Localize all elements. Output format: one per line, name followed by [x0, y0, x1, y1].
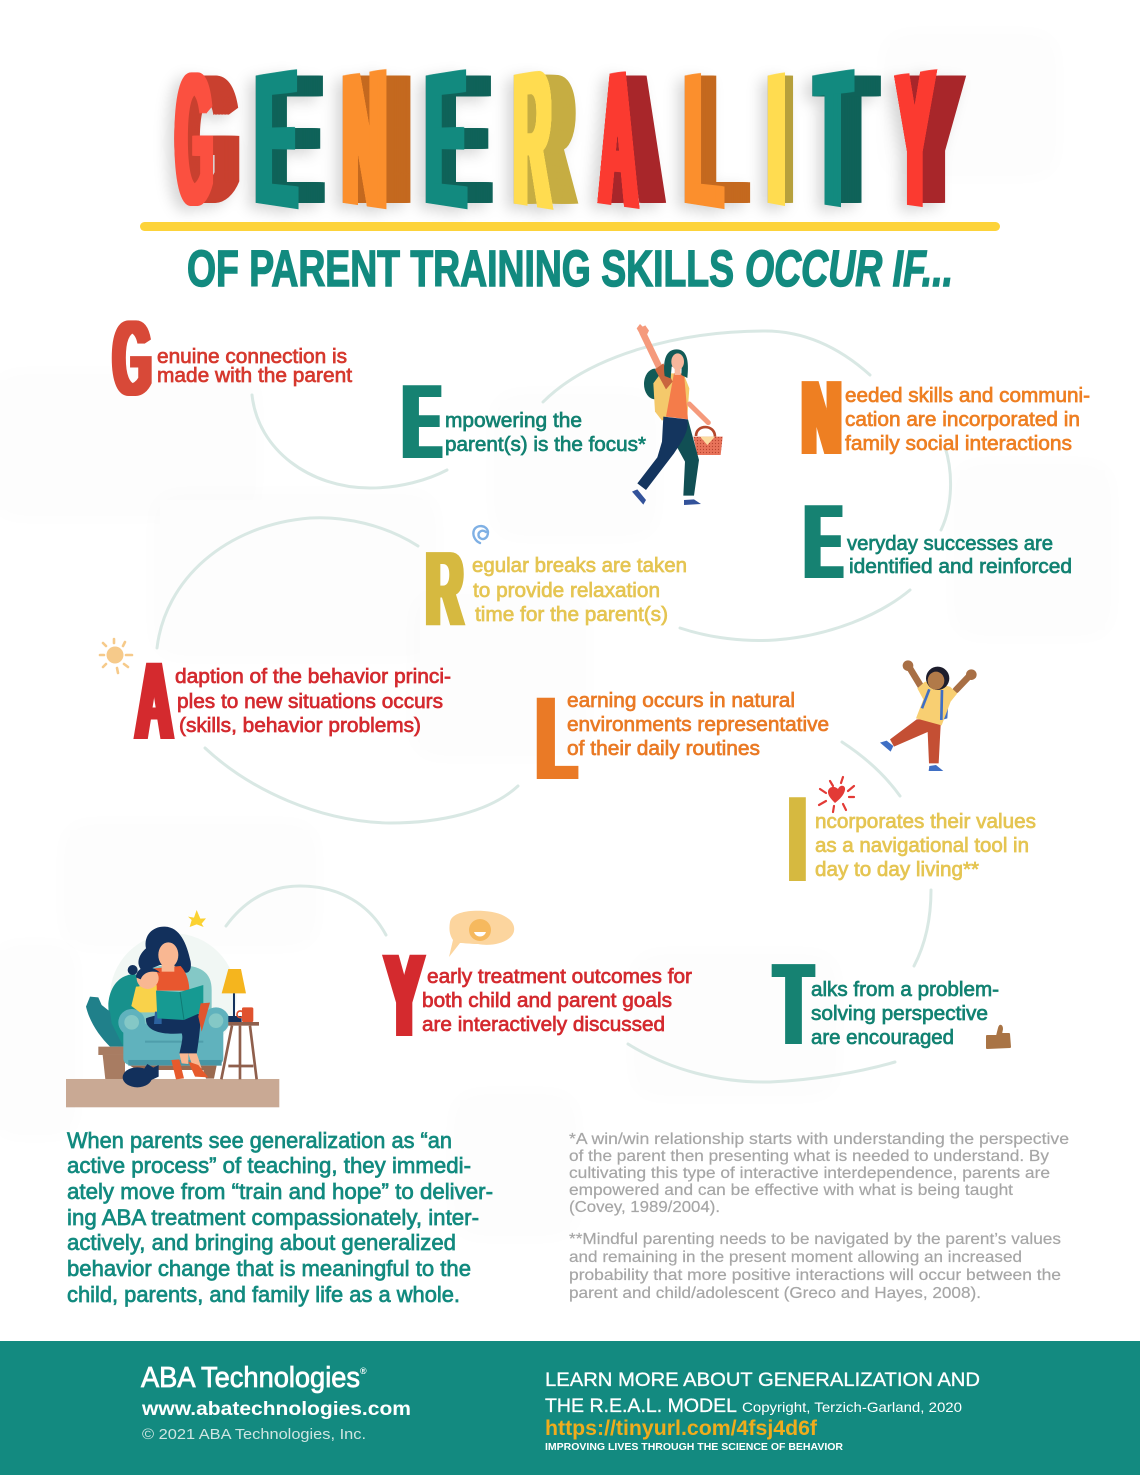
subtitle: OCCUR IF... — [745, 240, 953, 297]
illustration: mother reading with child — [66, 910, 279, 1107]
block: E everyday successes — [805, 483, 1072, 601]
block: E empowering: mpowering the — [445, 410, 582, 432]
block: Y yearly treatment: both child and parent goals — [422, 990, 672, 1012]
block: R regular breaks: time for the parent(s) — [475, 604, 668, 626]
footnotes: **Mindful parenting needs to be navigated by the parent’s values — [569, 1231, 1061, 1248]
block: R regular breaks: egular breaks are taken — [472, 555, 687, 577]
title underline bar — [140, 222, 1000, 231]
title: GENERALITY 3D letters: E — [420, 36, 479, 244]
title: GENERALITY 3D letters: G — [172, 34, 209, 246]
bottom-left summary paragraph: child, parents, and family life as a whole. — [67, 1282, 460, 1307]
footer call to action — [545, 1370, 980, 1453]
bottom-left summary paragraph — [67, 1128, 493, 1307]
footer logo and website: ABA Technologies — [141, 1362, 360, 1394]
title: GENERALITY 3D letters: L — [681, 28, 717, 252]
block: N needed skills — [802, 358, 1090, 477]
footer call to action: https://tinyurl.com/4fsj4d6f — [545, 1417, 818, 1440]
block: N needed skills: eeded skills and communi- — [845, 385, 1090, 407]
title: GENERALITY 3D letters: T — [812, 28, 847, 252]
icon: thumbs up — [987, 1026, 1010, 1048]
block: Y yearly treatment: Y — [385, 929, 423, 1061]
block: E empowering: E — [403, 362, 441, 480]
block: L learning: of their daily routines — [567, 738, 760, 760]
illustration: child jumping — [880, 660, 977, 771]
block: Y yearly treatment: are interactively discussed — [422, 1014, 665, 1036]
title: GENERALITY 3D letters — [162, 27, 966, 253]
footnotes: of the parent then presenting what is needed to understand. By — [569, 1148, 1049, 1165]
block: A adaption: ples to new situations occurs — [177, 691, 443, 713]
block: I incorporates: as a navigational tool in — [815, 835, 1029, 857]
block: A adaption — [136, 640, 451, 763]
footnotes: cultivating this type of interactive interdependence, parents are — [569, 1165, 1050, 1182]
title: GENERALITY 3D letters: E — [422, 28, 461, 252]
title: GENERALITY 3D letters: E — [250, 36, 310, 244]
block: T talks: solving perspective — [811, 1003, 988, 1025]
title: GENERALITY 3D letters: R — [509, 35, 564, 245]
block: T talks: are encouraged — [811, 1027, 954, 1049]
block: A adaption: (skills, behavior problems) — [179, 715, 421, 737]
block: E empowering — [403, 362, 646, 480]
block: I incorporates — [789, 772, 1036, 908]
title: GENERALITY 3D letters: G — [171, 39, 229, 241]
block: L learning — [537, 673, 829, 805]
title: GENERALITY 3D letters: Y — [893, 36, 950, 244]
icon: heart with rays — [819, 777, 854, 812]
block: G genuine connection: G — [113, 298, 151, 418]
title: GENERALITY 3D letters: A — [596, 28, 633, 252]
block: A adaption: daption of the behavior princi- — [175, 666, 451, 688]
title: GENERALITY 3D letters: N — [339, 27, 382, 253]
footnotes — [569, 1131, 1069, 1302]
footnotes: parent and child/adolescent (Greco and Hayes, 2008). — [569, 1285, 981, 1302]
block: R regular breaks: R — [426, 530, 463, 648]
block: A adaption: A — [136, 640, 173, 763]
block: R regular breaks — [426, 530, 687, 648]
icon: chat bubble with smile — [449, 911, 514, 957]
title: GENERALITY 3D letters: E — [252, 28, 292, 252]
block: G genuine connection: enuine connection is — [157, 346, 347, 368]
block: T talks: alks from a problem- — [811, 979, 999, 1001]
block: L learning: L — [537, 673, 576, 805]
footer call to action: LEARN MORE ABOUT GENERALIZATION AND — [545, 1370, 980, 1391]
bottom-left summary paragraph: ately move from “train and hope” to deliver- — [67, 1179, 493, 1204]
footer call to action: IMPROVING LIVES THROUGH THE SCIENCE OF BEHAVIOR — [545, 1442, 844, 1453]
block: N needed skills: family social interactions — [845, 433, 1072, 455]
footnotes: probability that more positive interactions will occur between the — [569, 1267, 1061, 1284]
footer call to action: THE R.E.A.L. MODEL — [545, 1396, 737, 1417]
subtitle: OF PARENT TRAINING SKILLS — [187, 240, 734, 297]
block: E everyday successes: identified and reinforced — [849, 556, 1072, 578]
block: R regular breaks: to provide relaxation — [473, 580, 660, 602]
block: E everyday successes: E — [805, 483, 842, 601]
block: Y yearly treatment: early treatment outcomes for — [427, 966, 692, 988]
title: GENERALITY 3D letters: N — [337, 36, 399, 244]
illustration: woman waving with bag — [632, 324, 723, 505]
block: E everyday successes: veryday successes are — [847, 533, 1053, 555]
title: GENERALITY 3D letters: I — [764, 33, 780, 247]
block: G genuine connection: made with the parent — [157, 365, 352, 387]
bottom-left summary paragraph: active process” of teaching, they immedi- — [67, 1153, 471, 1178]
footer logo and website: www.abatechnologies.com — [141, 1399, 411, 1420]
bottom-left summary paragraph: behavior change that is meaningful to the — [67, 1256, 471, 1281]
block: I incorporates: I — [789, 772, 806, 908]
connecting arcs — [157, 331, 951, 1082]
block: I incorporates: day to day living** — [815, 859, 979, 881]
block: N needed skills: cation are incorporated in — [845, 409, 1080, 431]
block: Y yearly treatment — [385, 929, 692, 1061]
bottom-left summary paragraph: ing ABA treatment compassionately, inter- — [67, 1205, 479, 1230]
icon: sun — [100, 639, 132, 673]
block: E empowering: parent(s) is the focus* — [445, 434, 646, 456]
block: T talks: T — [775, 939, 812, 1069]
footer logo and website: © 2021 ABA Technologies, Inc. — [142, 1426, 366, 1443]
footnotes: (Covey, 1989/2004). — [569, 1199, 720, 1216]
footer logo and website — [141, 1362, 411, 1443]
footer call to action: Copyright, Terzich-Garland, 2020 — [742, 1399, 962, 1415]
block: G genuine connection — [113, 298, 352, 418]
icon: swirl — [473, 526, 488, 543]
title: GENERALITY 3D letters: R — [511, 27, 547, 253]
bottom-left summary paragraph: actively, and bringing about generalized — [67, 1230, 456, 1255]
block: L learning: environments representative — [567, 714, 829, 736]
footnotes: empowered and can be effective with what is being taught — [569, 1182, 1014, 1199]
footer logo and website: ® — [360, 1366, 367, 1376]
bottom-left summary paragraph: When parents see generalization as “an — [67, 1128, 452, 1153]
block: I incorporates: ncorporates their values — [815, 811, 1036, 833]
title: GENERALITY 3D letters: I — [763, 36, 783, 244]
title: GENERALITY 3D letters: L — [679, 36, 735, 244]
block: L learning: earning occurs in natural — [567, 690, 795, 712]
footnotes: *A win/win relationship starts with understanding the perspective — [569, 1131, 1069, 1148]
title: GENERALITY 3D letters: T — [811, 36, 864, 244]
title: GENERALITY 3D letters: A — [596, 36, 653, 244]
footnotes: and remaining in the present moment allowing an increased — [569, 1249, 1022, 1266]
footer band — [0, 1341, 1140, 1475]
title: GENERALITY 3D letters: Y — [893, 28, 930, 252]
block: T talks — [775, 939, 999, 1069]
block: N needed skills: N — [802, 358, 841, 477]
